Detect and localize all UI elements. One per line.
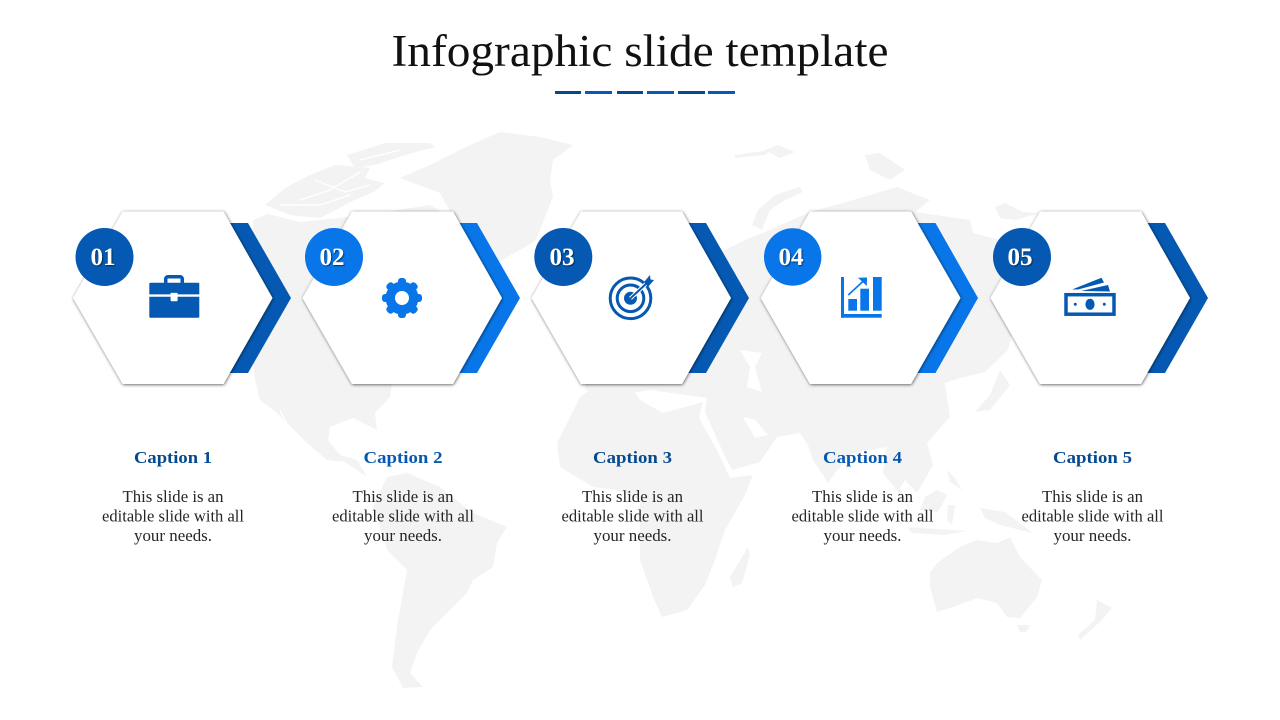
chevron 5 <box>1146 223 1208 373</box>
caption block 3: your needs. <box>594 526 672 545</box>
title underline dashes <box>555 91 735 94</box>
badge 03: 03 <box>550 244 574 271</box>
title: Infographic slide template <box>392 26 888 76</box>
hexagon 2 <box>302 212 502 384</box>
caption block 2 <box>332 448 474 545</box>
caption block 1 <box>102 448 244 545</box>
caption block 1: Caption 1 <box>134 448 212 467</box>
hexagon 5 <box>990 212 1190 384</box>
caption block 2: your needs. <box>364 526 442 545</box>
step 1 <box>73 212 291 384</box>
caption block 3: editable slide with all <box>562 506 704 526</box>
badge 05: 05 <box>1008 244 1032 271</box>
badge 02 <box>305 228 363 286</box>
badge 04 <box>764 228 821 286</box>
caption block 3: This slide is an <box>582 487 683 506</box>
icon: briefcase <box>149 275 199 318</box>
badge 01 <box>76 228 134 286</box>
badge 05 <box>993 228 1051 286</box>
icon: bar chart <box>841 277 882 318</box>
hexagon 1 <box>73 212 272 384</box>
caption block 2: Caption 2 <box>364 448 442 467</box>
chevron 1 <box>230 223 291 373</box>
chevron 3 <box>688 223 749 373</box>
hexagon 4 <box>761 212 960 384</box>
caption block 4: your needs. <box>824 526 902 545</box>
icon: target <box>610 275 654 319</box>
icon: money <box>1066 278 1114 314</box>
badge 04: 04 <box>778 244 804 271</box>
caption block 1: This slide is an <box>122 487 224 506</box>
caption block 4: This slide is an <box>812 487 913 506</box>
caption block 1: your needs. <box>134 526 212 545</box>
caption block 2: This slide is an <box>352 487 454 506</box>
caption block 4: Caption 4 <box>823 448 903 467</box>
caption block 2: editable slide with all <box>332 506 474 526</box>
step 4 <box>761 212 978 384</box>
step 2 <box>302 212 520 384</box>
chevron 2 <box>459 223 520 373</box>
caption block 3: Caption 3 <box>593 448 672 467</box>
badge 02: 02 <box>320 244 344 271</box>
world map background <box>250 132 1112 688</box>
caption block 5: your needs. <box>1054 526 1132 545</box>
caption block 5 <box>1022 448 1164 545</box>
hexagon 3 <box>532 212 731 384</box>
caption block 3 <box>562 448 704 545</box>
badge 01: 01 <box>90 244 116 271</box>
badge 03 <box>534 228 592 286</box>
icon: gear <box>382 278 422 318</box>
step 5 <box>990 212 1208 384</box>
caption block 4: editable slide with all <box>792 506 934 526</box>
caption block 5: Caption 5 <box>1053 448 1132 467</box>
chevron 4 <box>918 223 978 373</box>
caption block 1: editable slide with all <box>102 506 244 526</box>
caption block 5: editable slide with all <box>1022 506 1164 526</box>
step 3 <box>532 212 749 384</box>
caption block 5: This slide is an <box>1042 487 1143 506</box>
caption block 4 <box>792 448 934 545</box>
